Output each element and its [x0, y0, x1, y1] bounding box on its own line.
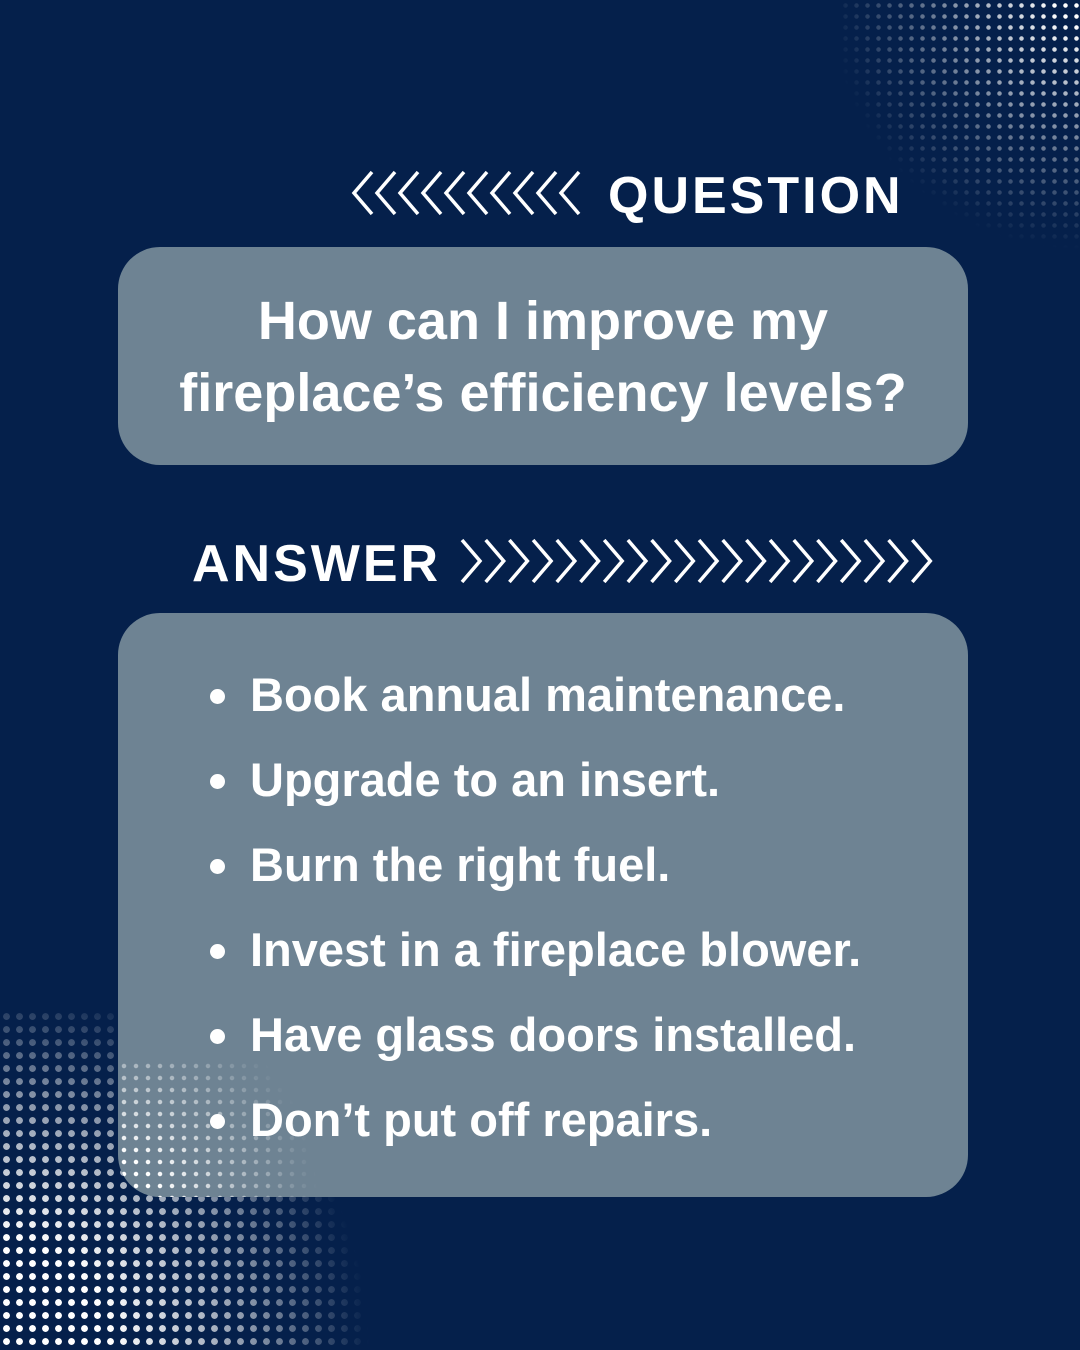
panel: answer — [118, 613, 968, 1197]
answer list: Book annual maintenance. — [250, 668, 845, 721]
answer heading: ANSWER — [192, 535, 441, 593]
question text: fireplace’s efficiency levels? — [179, 363, 907, 423]
answer list: Don’t put off repairs. — [250, 1093, 712, 1146]
panel: question — [118, 247, 968, 465]
question text: How can I improve my — [258, 291, 828, 351]
answer list: Invest in a fireplace blower. — [250, 923, 861, 976]
halftone decoration bottom-left — [0, 1010, 380, 1350]
answer chevrons — [460, 538, 932, 584]
halftone overlay on answer panel corner — [122, 1064, 306, 1197]
question chevrons — [352, 170, 580, 216]
answer list: Upgrade to an insert. — [250, 753, 720, 806]
answer list — [210, 668, 861, 1146]
answer list: Have glass doors installed. — [250, 1008, 856, 1061]
answer list: Burn the right fuel. — [250, 838, 670, 891]
question text — [179, 291, 907, 423]
question heading: QUESTION — [608, 167, 904, 225]
halftone decoration top-right — [844, 3, 1079, 238]
